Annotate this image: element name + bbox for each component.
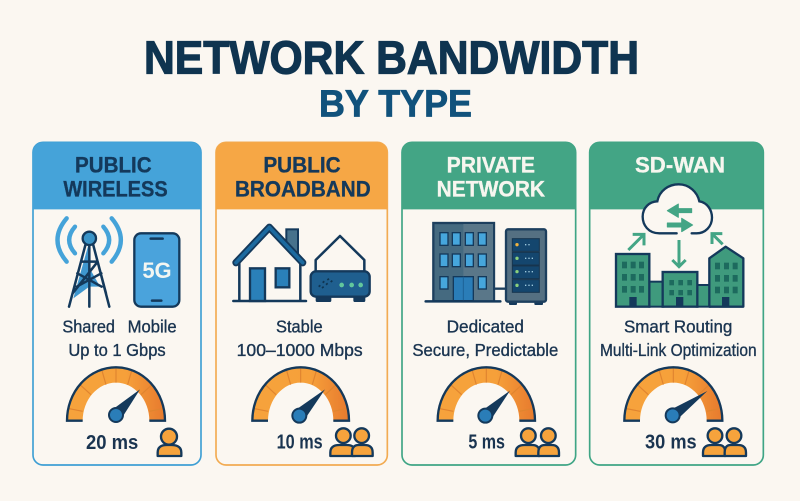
panel: public wireless: [33, 142, 201, 465]
icon: cloud with routing arrows: [643, 184, 712, 233]
heading: WIRELESS: [63, 177, 168, 202]
heading: SD-WAN: [635, 153, 725, 178]
title: NETWORK BANDWIDTH: [144, 32, 639, 84]
subtitle: BY TYPE: [319, 84, 472, 126]
description: Smart Routing: [624, 317, 732, 337]
icon: router: [311, 236, 370, 302]
latency value: 30 ms: [645, 430, 697, 453]
heading: [437, 153, 545, 202]
description: Secure, Predictable: [412, 340, 558, 360]
card frame: [216, 142, 387, 465]
gauge: [624, 367, 722, 422]
icon: server rack: [506, 229, 546, 305]
description: Multi-Link Optimization: [600, 340, 757, 360]
gauge: [252, 367, 349, 423]
description: 100–1000 Mbps: [237, 340, 363, 360]
panel: public broadband: [216, 142, 387, 465]
icon: cell tower: [57, 218, 121, 307]
description: [412, 317, 558, 360]
icon: two users: [516, 428, 559, 456]
gauge: [67, 367, 165, 422]
icon: house: [233, 227, 306, 301]
header band: [402, 142, 576, 209]
panel: sd-wan: [590, 142, 763, 465]
description: Mobile: [128, 317, 177, 337]
heading: BROADBAND: [235, 177, 371, 202]
description: Dedicated: [447, 317, 524, 337]
latency value: 10 ms: [277, 430, 323, 453]
icon: two users: [703, 428, 746, 456]
description: [600, 317, 757, 360]
header band: [590, 142, 763, 209]
header band: [216, 142, 387, 209]
description: Stable: [276, 317, 323, 337]
latency value: 20 ms: [86, 431, 138, 454]
card frame: [402, 142, 576, 465]
description: [62, 317, 177, 360]
panel: private network: [402, 142, 576, 465]
description: Shared: [62, 317, 115, 337]
description: Up to 1 Gbps: [68, 340, 166, 360]
icon: 5G phone: [134, 233, 179, 307]
arrows to branch buildings: [628, 234, 723, 267]
icon: one user: [158, 429, 181, 456]
heading: [235, 153, 371, 202]
icon: two users: [330, 428, 373, 456]
icon: office building: [426, 223, 500, 301]
gauge: [438, 367, 535, 423]
connector cable: [494, 285, 507, 292]
heading: PRIVATE: [447, 153, 535, 178]
heading: PUBLIC: [75, 153, 152, 178]
icon: 5G phone: 5G: [142, 258, 172, 283]
card frame: [33, 142, 201, 465]
description: [237, 317, 363, 360]
header band: [33, 142, 201, 209]
heading: NETWORK: [437, 177, 545, 202]
heading: [63, 153, 168, 202]
latency value: 5 ms: [468, 430, 505, 453]
card frame: [590, 142, 763, 465]
heading: PUBLIC: [263, 153, 341, 178]
icon: three branch buildings: [616, 247, 743, 307]
